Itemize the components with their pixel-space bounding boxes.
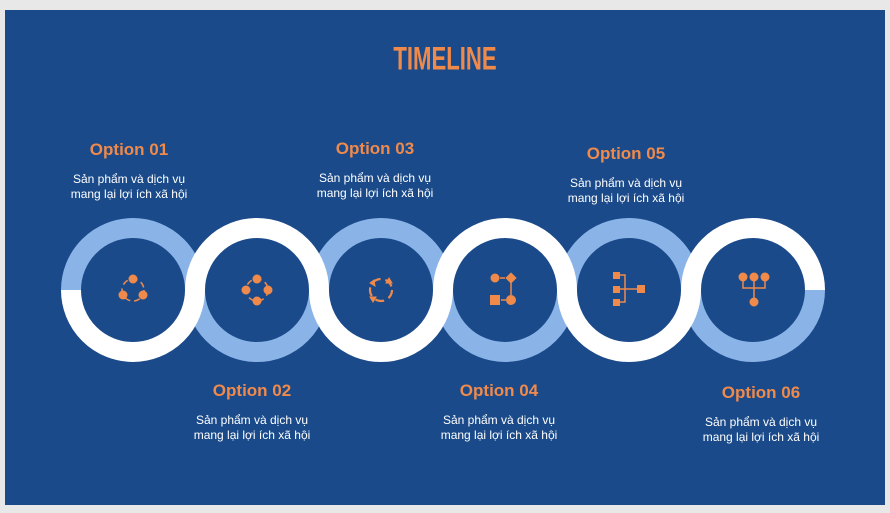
icon 3 xyxy=(370,278,392,302)
icon 2 xyxy=(242,276,272,304)
option 01: mang lại lợi ích xã hội xyxy=(71,187,187,201)
option 06: Option 06 xyxy=(722,383,800,402)
option 01 xyxy=(71,140,187,201)
icon 4 xyxy=(491,274,515,304)
option 05 xyxy=(568,144,684,205)
option 02: Option 02 xyxy=(213,381,291,400)
option 03: Sản phẩm và dịch vụ xyxy=(319,171,431,185)
option 05: Sản phẩm và dịch vụ xyxy=(570,176,682,190)
option 04 xyxy=(441,381,557,442)
option 06: mang lại lợi ích xã hội xyxy=(703,430,819,444)
option 04: Sản phẩm và dịch vụ xyxy=(443,413,555,427)
option 02 xyxy=(194,381,310,442)
option 05: mang lại lợi ích xã hội xyxy=(568,191,684,205)
option 02: mang lại lợi ích xã hội xyxy=(194,428,310,442)
option 04: mang lại lợi ích xã hội xyxy=(441,428,557,442)
option 04: Option 04 xyxy=(460,381,538,400)
option 03 xyxy=(317,139,433,200)
option 03: mang lại lợi ích xã hội xyxy=(317,186,433,200)
icon 1 xyxy=(120,276,146,301)
option 06 xyxy=(703,383,819,444)
option 03: Option 03 xyxy=(336,139,414,158)
icon 6 xyxy=(740,274,768,306)
option 01: Sản phẩm và dịch vụ xyxy=(73,172,185,186)
title: TIMELINE xyxy=(393,41,497,77)
option 06: Sản phẩm và dịch vụ xyxy=(705,415,817,429)
option 05: Option 05 xyxy=(587,144,665,163)
option 01: Option 01 xyxy=(90,140,168,159)
icon 5 xyxy=(614,273,644,305)
option 02: Sản phẩm và dịch vụ xyxy=(196,413,308,427)
